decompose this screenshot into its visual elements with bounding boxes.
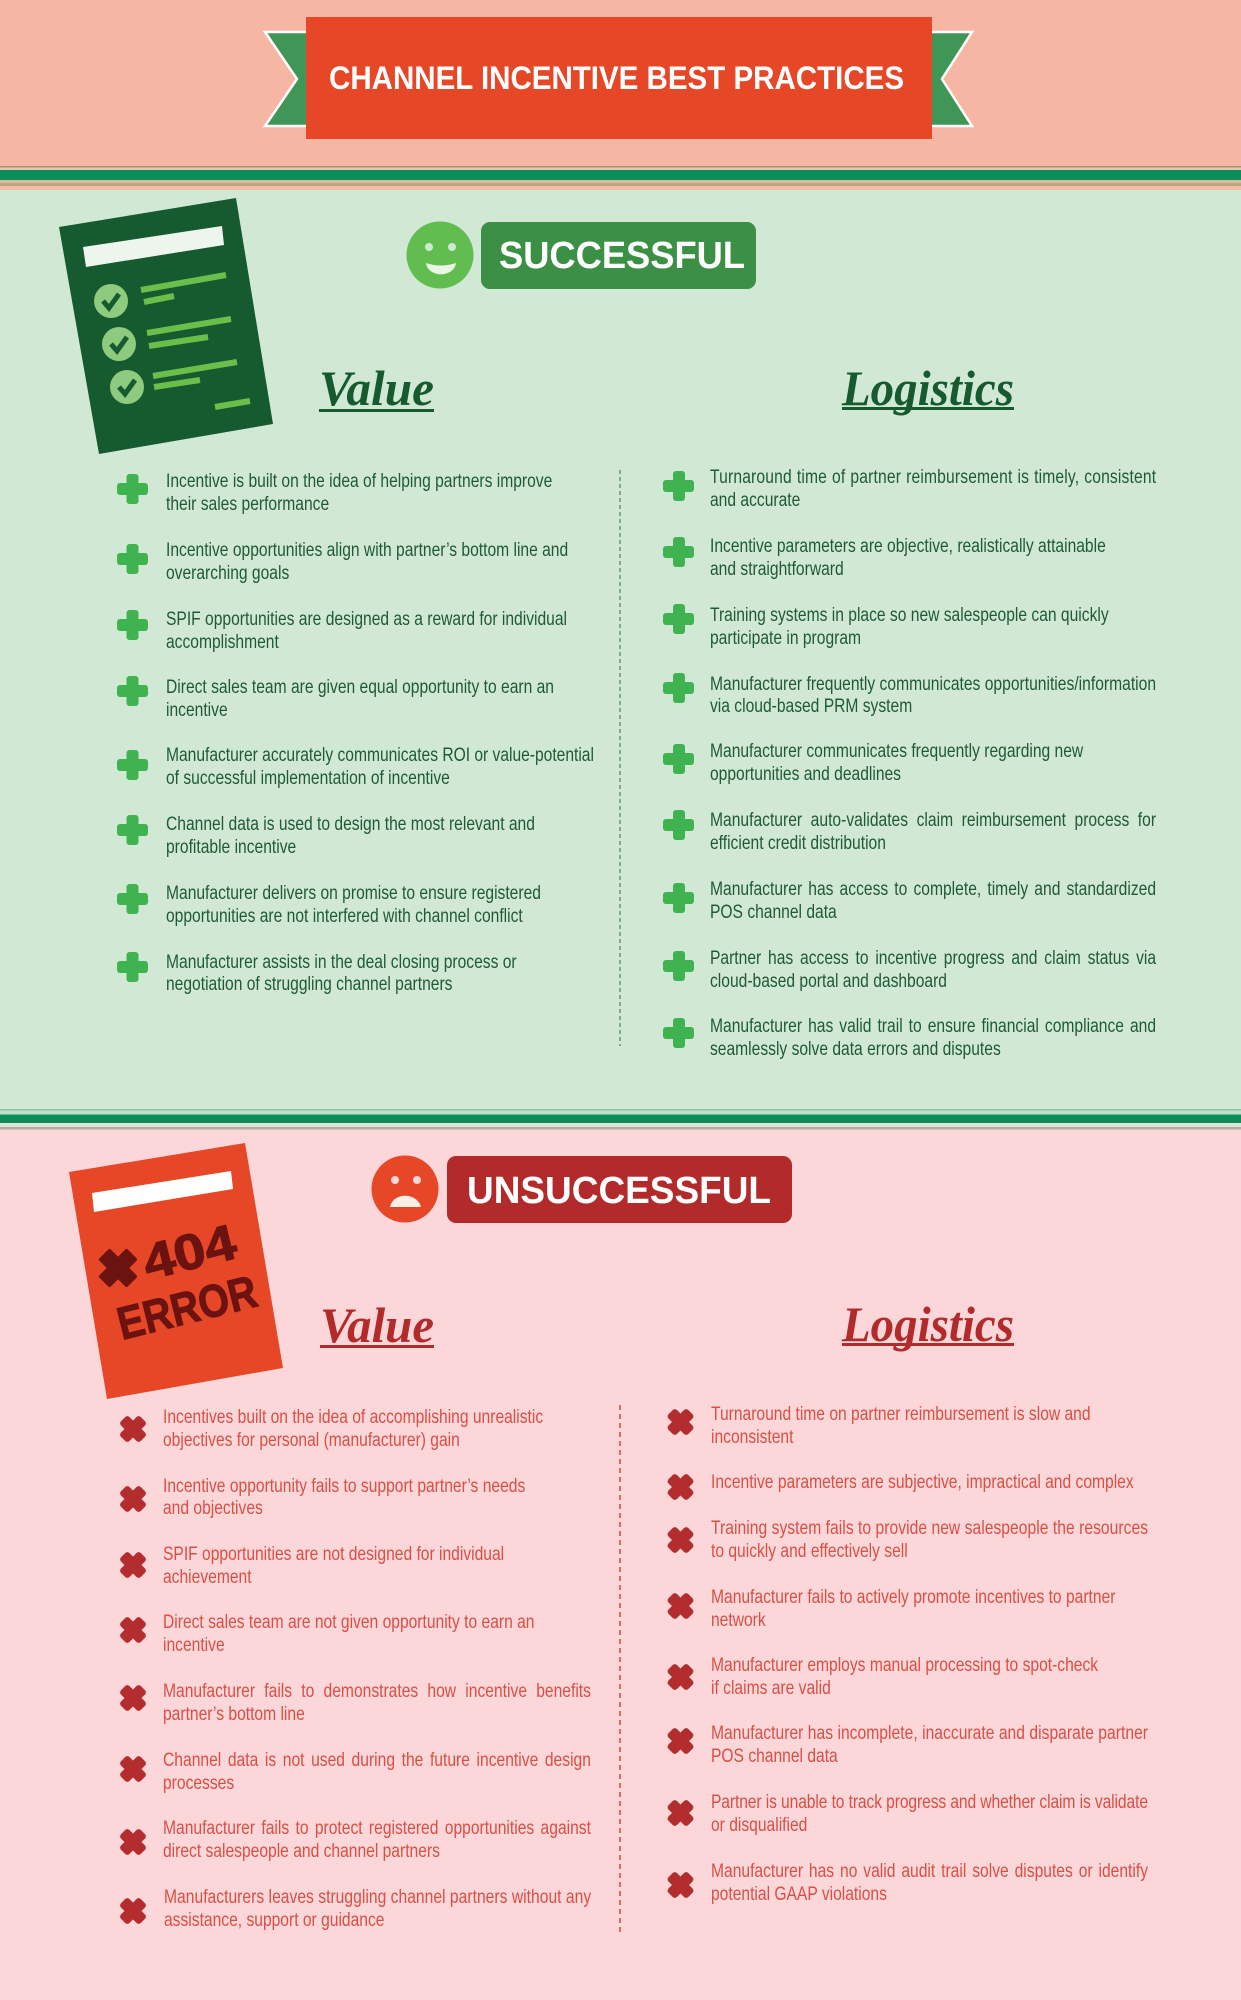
list item (663, 947, 1156, 991)
badge: successful: SUCCESSFUL (499, 235, 745, 277)
heading: value: Value (319, 360, 434, 416)
list item: and straightforward (710, 558, 844, 579)
list item: Channel data is used to design the most relevant and (166, 813, 535, 834)
icon: 404 error document (69, 1143, 283, 1399)
list item: partner’s bottom line (163, 1703, 305, 1724)
badge: unsuccessful (447, 1156, 792, 1223)
list item (663, 878, 1156, 922)
list item: Incentive opportunity fails to support partner’s needs (163, 1475, 526, 1496)
list: unsuccessful value (113, 1406, 591, 1931)
list item: Channel data is not used during the future incentive design (163, 1749, 591, 1770)
list item (663, 1015, 1156, 1059)
list item: accomplishment (166, 631, 279, 652)
panel: successful (59, 198, 1156, 1059)
list item: negotiation of struggling channel partners (166, 973, 453, 994)
list item: Manufacturer fails to demonstrates how incentive benefits (163, 1680, 591, 1701)
list item (661, 1467, 1134, 1507)
list item: objectives for personal (manufacturer) gain (163, 1429, 460, 1450)
icon: smiling face (406, 222, 474, 288)
list item: assistance, support or guidance (164, 1909, 384, 1930)
list item: Training system fails to provide new salespeople the resources (711, 1517, 1148, 1538)
list item (661, 1517, 1148, 1561)
list item: Manufacturer has valid trail to ensure financial compliance and (710, 1015, 1156, 1036)
list item: Partner is unable to track progress and whether claim is validate (711, 1791, 1148, 1812)
list item: network (711, 1609, 766, 1630)
list item: Manufacturers leaves struggling channel partners without any (164, 1886, 591, 1907)
list item: Manufacturer frequently communicates opportunities/information (710, 673, 1156, 694)
list item: Manufacturer has incomplete, inaccurate and disparate partner (711, 1722, 1148, 1743)
title banner (265, 17, 972, 139)
list item: Incentive parameters are subjective, impractical and complex (711, 1471, 1134, 1492)
list item: Manufacturer accurately communicates ROI or value-potential (166, 744, 594, 765)
list item (663, 466, 1156, 510)
list item: of successful implementation of incentive (166, 767, 450, 788)
list item: Training systems in place so new salespeople can quickly (710, 604, 1109, 625)
title: CHANNEL INCENTIVE BEST PRACTICES (329, 60, 904, 96)
list item (113, 1678, 591, 1724)
list item (113, 1610, 534, 1655)
list item: Manufacturer auto-validates claim reimbursement process for (710, 809, 1156, 830)
list item: POS channel data (710, 901, 837, 922)
list item: incentive (163, 1634, 225, 1655)
list item: profitable incentive (166, 836, 296, 857)
heading: logistics: Logistics (841, 1296, 1014, 1352)
badge: successful (481, 222, 756, 289)
list item: and accurate (710, 489, 800, 510)
list item (663, 673, 1156, 716)
list item: Manufacturer has no valid audit trail solve disputes or identify (711, 1860, 1148, 1881)
list item (661, 1791, 1148, 1835)
list item (117, 608, 567, 652)
list item: opportunities and deadlines (710, 763, 901, 784)
panel: unsuccessful (69, 1143, 1148, 1934)
list item: Manufacturer assists in the deal closing process or (166, 951, 517, 972)
list: unsuccessful logistics (661, 1402, 1148, 1905)
list item (113, 1543, 504, 1587)
list: successful value (117, 470, 594, 994)
list item: seamlessly solve data errors and disputes (710, 1038, 1001, 1059)
list item: or disqualified (711, 1814, 807, 1835)
ribbon tails (265, 32, 972, 126)
list item (117, 813, 535, 857)
list item: Manufacturer employs manual processing to spot-check (711, 1654, 1098, 1675)
list item (117, 951, 517, 994)
list item: Direct sales team are given equal opportunity to earn an (166, 676, 554, 697)
list item: achievement (163, 1566, 252, 1587)
list item: direct salespeople and channel partners (163, 1840, 440, 1861)
list item: SPIF opportunities are designed as a reward for individual (166, 608, 567, 629)
list item: via cloud-based PRM system (710, 695, 912, 716)
heading: value: Value (320, 1297, 434, 1353)
list item: Direct sales team are not given opportunity to earn an (163, 1611, 534, 1632)
list item: Manufacturer fails to actively promote incentives to partner (711, 1586, 1116, 1607)
list item (117, 744, 594, 788)
list item: processes (163, 1772, 234, 1793)
list item: POS channel data (711, 1745, 838, 1766)
list item (663, 809, 1156, 853)
list item: inconsistent (711, 1426, 794, 1447)
list item: overarching goals (166, 562, 290, 583)
list item (113, 1406, 543, 1450)
icon: sad face (372, 1156, 438, 1222)
icon: checklist document (59, 198, 273, 454)
list item: Manufacturer fails to protect registered opportunities against (163, 1817, 591, 1838)
list item (117, 539, 568, 583)
list item (663, 604, 1109, 648)
list item (117, 882, 541, 926)
list item (113, 1817, 591, 1862)
list item (117, 676, 554, 720)
list item: SPIF opportunities are not designed for individual (163, 1543, 504, 1564)
list item (113, 1475, 526, 1519)
list item (661, 1654, 1098, 1698)
list item: Incentives built on the idea of accomplishing unrealistic (163, 1406, 543, 1427)
list item (661, 1860, 1148, 1905)
list item: Incentive is built on the idea of helping partners improve (166, 470, 552, 491)
list item: Manufacturer communicates frequently regarding new (710, 740, 1084, 761)
list item: potential GAAP violations (711, 1883, 887, 1904)
list item: Incentive opportunities align with partner’s bottom line and (166, 539, 568, 560)
list item: Incentive parameters are objective, realistically attainable (710, 535, 1106, 556)
icon: 404 error document: 404 (137, 1214, 242, 1291)
list item (663, 535, 1106, 579)
list item (663, 740, 1084, 784)
list item: and objectives (163, 1497, 263, 1518)
list: successful logistics (663, 466, 1156, 1059)
list item (113, 1749, 591, 1793)
list item (113, 1886, 591, 1931)
list item (117, 470, 552, 514)
list item: to quickly and effectively sell (711, 1540, 908, 1561)
list item: opportunities are not interfered with channel conflict (166, 905, 523, 926)
list item (661, 1721, 1148, 1766)
icon: 404 error document: ERROR (112, 1265, 262, 1350)
list item: Partner has access to incentive progress and claim status via (710, 947, 1156, 968)
red banner (306, 17, 932, 139)
list item: Manufacturer has access to complete, timely and standardized (710, 878, 1156, 899)
list item: participate in program (710, 627, 861, 648)
list item (661, 1586, 1116, 1630)
list item: efficient credit distribution (710, 832, 886, 853)
list item: their sales performance (166, 493, 329, 514)
list item: Turnaround time on partner reimbursement is slow and (711, 1403, 1091, 1424)
badge: unsuccessful: UNSUCCESSFUL (467, 1170, 771, 1212)
list item: Manufacturer delivers on promise to ensure registered (166, 882, 541, 903)
list item: cloud-based portal and dashboard (710, 970, 947, 991)
list item: if claims are valid (711, 1677, 831, 1698)
list item (661, 1402, 1091, 1447)
heading: logistics: Logistics (841, 360, 1014, 416)
list item: Turnaround time of partner reimbursement is timely, consistent (710, 466, 1156, 487)
list item: incentive (166, 699, 228, 720)
